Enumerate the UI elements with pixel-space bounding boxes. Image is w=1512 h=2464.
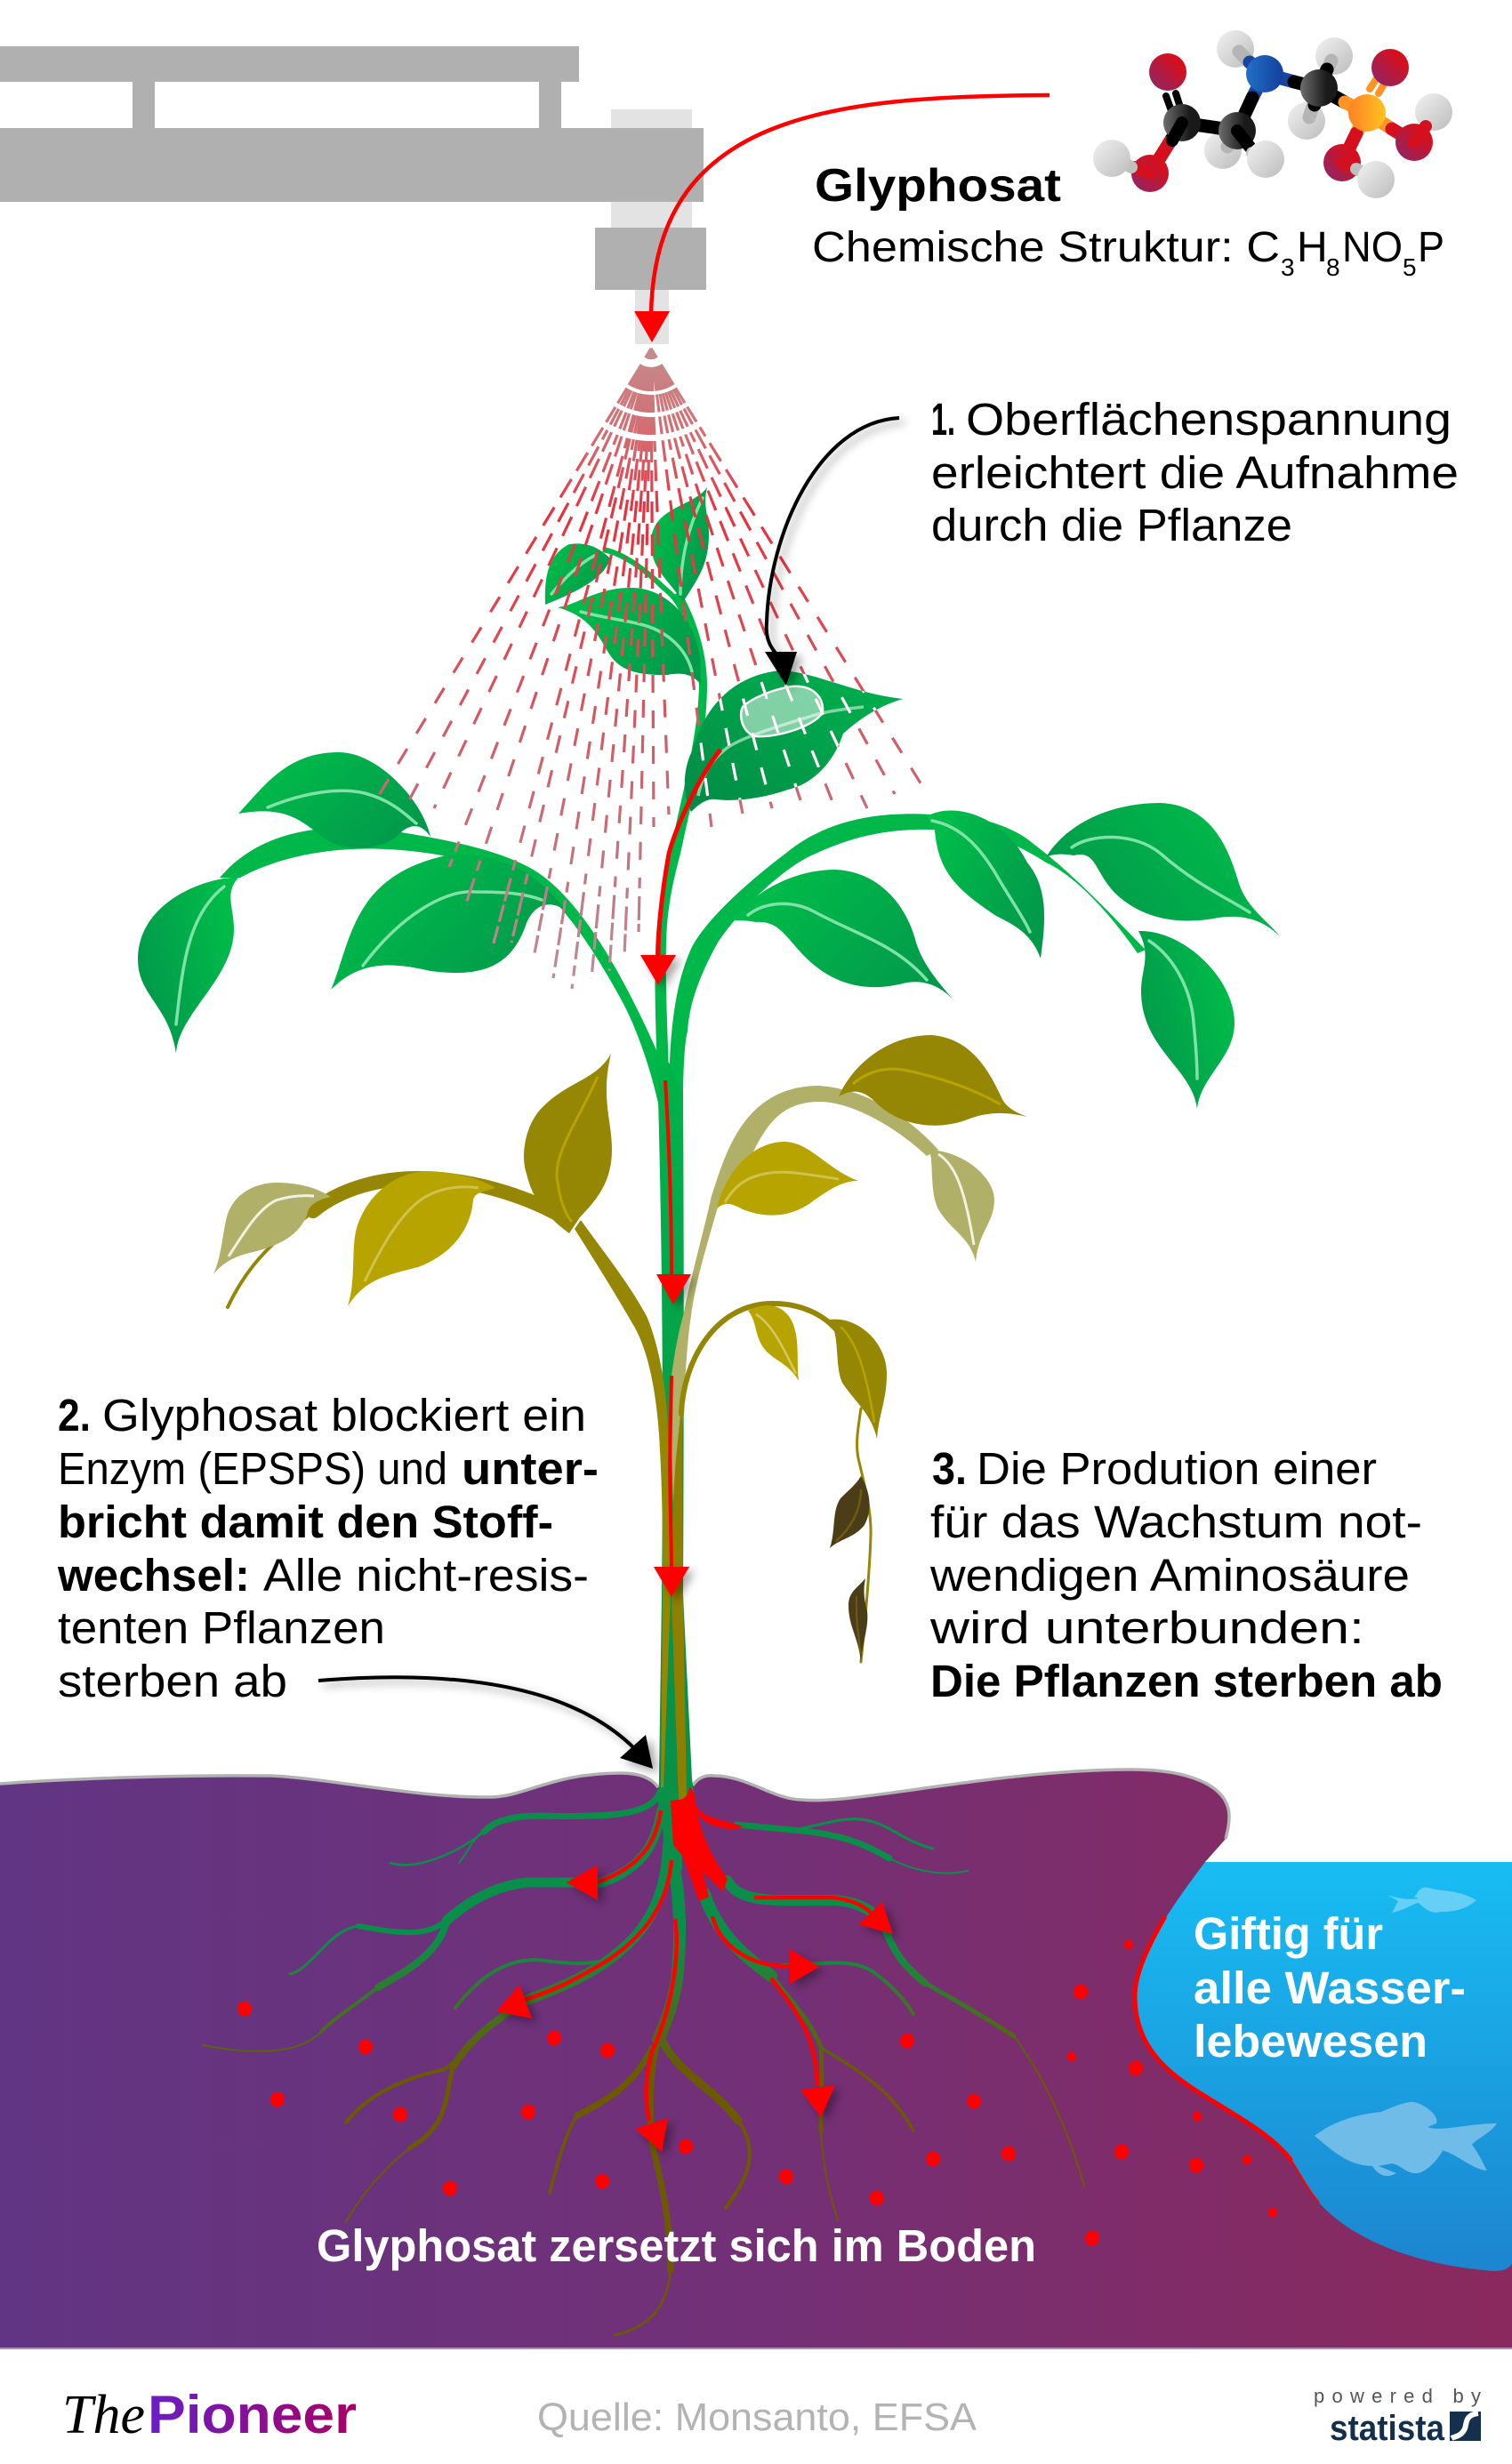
text block: step 3: Die Pflanzen sterben ab bbox=[930, 1656, 1443, 1706]
leaf: hanging right green bbox=[927, 810, 1044, 959]
molecule: glyphosate bbox=[1093, 30, 1452, 198]
text block: step 2: bricht damit den Stoff- bbox=[58, 1497, 553, 1547]
leaf: upright olive bbox=[524, 1054, 612, 1233]
roots bbox=[203, 1792, 1084, 2335]
water label: alle Wasser- bbox=[1194, 1962, 1466, 2013]
leaf: small olive bbox=[830, 1320, 887, 1439]
water label: lebewesen bbox=[1194, 2016, 1428, 2067]
leaf: main treated leaf with droplet bbox=[685, 670, 903, 812]
droplet bbox=[741, 686, 823, 736]
leaf: yellow right bbox=[717, 1142, 858, 1216]
leaf: yellow left bbox=[348, 1171, 495, 1306]
chemical formula: 8 bbox=[1326, 253, 1340, 281]
chemical formula: 5 bbox=[1403, 253, 1417, 281]
logo: The Pioneer: Pioneer bbox=[148, 2385, 357, 2444]
arrow: to droplet bbox=[765, 418, 899, 686]
text block: step 1: Oberflächenspannung bbox=[966, 394, 1452, 445]
leaf: pale far left bbox=[213, 1183, 331, 1274]
leaf: far left green bbox=[138, 878, 238, 1054]
text block: step 1 bbox=[931, 394, 1459, 550]
logo: The Pioneer bbox=[62, 2385, 357, 2445]
arrows: flow in roots bbox=[496, 1810, 893, 2152]
leaf: top large green bbox=[558, 588, 701, 685]
text block: step 2 bbox=[57, 1390, 599, 1706]
soil label: Glyphosat zersetzt sich im Boden bbox=[317, 2220, 1036, 2271]
logo: powered by statista: statista bbox=[1330, 2409, 1445, 2448]
text block: step 3: 3. bbox=[932, 1443, 967, 1494]
leaf: right centre green bbox=[732, 870, 957, 1004]
logo: powered by statista: powered by bbox=[1314, 2385, 1481, 2407]
text block: step 3: wird unterbunden: bbox=[929, 1602, 1364, 1653]
text block: step 3: Die Prodution einer bbox=[977, 1443, 1377, 1494]
text block: step 2: Glyphosat blockiert ein bbox=[102, 1390, 586, 1441]
red glyphosate mass at root crown bbox=[671, 1786, 743, 1901]
leaf: dark withered upper bbox=[830, 1476, 870, 1548]
chemical formula: H bbox=[1297, 224, 1328, 271]
spray on leaf bbox=[699, 674, 877, 800]
text block: step 1: durch die Pflanze bbox=[931, 500, 1292, 550]
water bbox=[1135, 1862, 1512, 2271]
heading: Glyphosat: Glyphosat bbox=[815, 160, 1061, 212]
leaf: left centre green bbox=[331, 855, 566, 990]
logo: powered by statista bbox=[1314, 2385, 1481, 2448]
arrow: to root crown bbox=[318, 1677, 653, 1769]
text block: step 3: für das Wachstum not- bbox=[930, 1497, 1422, 1547]
soil bbox=[0, 1770, 1512, 2349]
water label: Giftig für bbox=[1194, 1908, 1383, 1959]
plant: olive stems bbox=[228, 1178, 871, 1800]
leaf: pale right bbox=[929, 1150, 994, 1262]
arrow: glyphosate to nozzle bbox=[634, 95, 1050, 342]
chemical formula bbox=[812, 224, 1444, 281]
source: Quelle: Monsanto, EFSA bbox=[537, 2396, 977, 2439]
text block: step 1: 1. bbox=[931, 394, 955, 445]
leaf: far right green bbox=[1046, 803, 1280, 936]
logo: The Pioneer: The bbox=[62, 2385, 145, 2445]
text block: step 2: Alle nicht-resis- bbox=[263, 1550, 589, 1601]
chemical formula: 3 bbox=[1281, 253, 1295, 281]
text block: step 2: sterben ab bbox=[58, 1656, 287, 1706]
text block: step 3 bbox=[929, 1443, 1443, 1706]
plant: pale stem bbox=[672, 1086, 938, 1512]
leaf: dark withered lower bbox=[848, 1578, 867, 1662]
text block: step 2: unter- bbox=[462, 1443, 599, 1494]
text block: step 2: Enzym (EPSPS) und bbox=[58, 1443, 447, 1494]
sprayer boom bbox=[0, 46, 706, 344]
glyphosate particles in soil bbox=[237, 1940, 1277, 2246]
text block: step 1: erleichtert die Aufnahme bbox=[931, 447, 1459, 498]
chemical formula: Chemische Struktur: C bbox=[812, 224, 1280, 271]
plant: green stems bbox=[220, 550, 1146, 1805]
leaf: olive top right bbox=[839, 1035, 1027, 1126]
leaf: upper left green bbox=[238, 752, 430, 848]
spray cone bbox=[371, 349, 922, 989]
text block: step 3: wendigen Aminosäure bbox=[929, 1550, 1410, 1601]
chemical formula: NO bbox=[1342, 224, 1403, 271]
leaf: lower far right green bbox=[1138, 931, 1235, 1109]
leaf: small yellow bbox=[748, 1305, 799, 1381]
arrow: sap flow in stem bbox=[640, 750, 720, 1597]
leaf: top vertical green bbox=[651, 487, 709, 602]
icon: big fish bbox=[1315, 2102, 1497, 2176]
leaf: top small green bbox=[545, 543, 610, 605]
text block: step 2: tenten Pflanzen bbox=[58, 1602, 385, 1653]
icon: small fish bbox=[1387, 1888, 1476, 1913]
text block: step 2: 2. bbox=[58, 1390, 91, 1441]
text block: step 2: wechsel: bbox=[57, 1550, 250, 1601]
chemical formula: P bbox=[1418, 224, 1444, 271]
water label bbox=[1194, 1908, 1466, 2067]
